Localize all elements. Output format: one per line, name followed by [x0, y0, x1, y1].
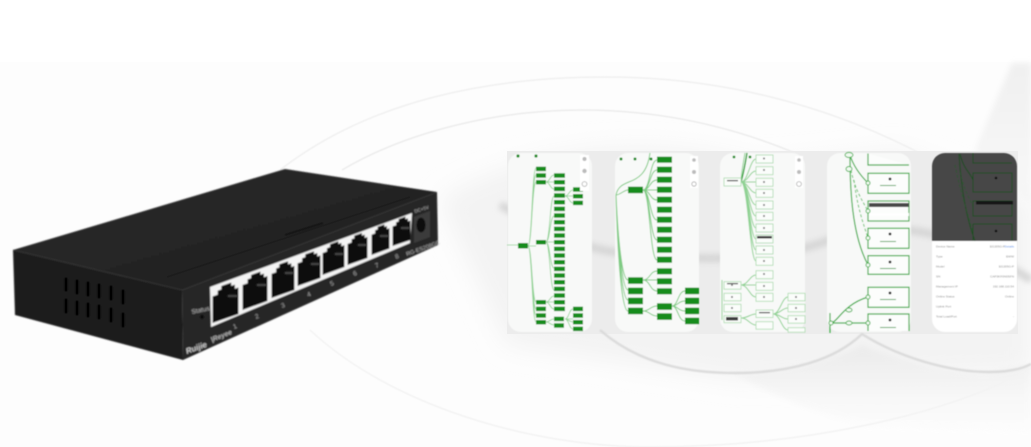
card glyphs	[880, 178, 896, 328]
device detail rows: Type	[936, 254, 943, 258]
side face	[13, 250, 183, 360]
panel: topology view, device cards	[720, 153, 805, 332]
panel tools	[580, 155, 589, 191]
dimmed topology backdrop	[932, 153, 1017, 241]
front face	[182, 192, 438, 360]
port numbers: 4	[306, 291, 312, 299]
port numbers: 5	[329, 280, 335, 288]
port numbers: 8	[394, 253, 400, 261]
device detail rows: Details	[1005, 244, 1014, 248]
port frame	[210, 213, 412, 327]
device detail rows: SN	[936, 274, 940, 278]
device labels: |Reyee	[210, 329, 233, 344]
enlarged connectors	[830, 155, 868, 333]
device cards	[724, 155, 805, 332]
port numbers	[232, 253, 400, 331]
device detail rows: Management IP	[936, 284, 958, 288]
device detail rows: EG205G-P	[999, 264, 1014, 268]
side vents	[66, 279, 123, 326]
port numbers: 7	[374, 262, 380, 270]
ethernet ports 1 to 8	[212, 215, 410, 323]
tree connectors	[616, 153, 685, 321]
status LED	[200, 315, 204, 319]
card icons	[731, 158, 797, 320]
highlighted dark cards	[726, 180, 772, 320]
panel: device detail sheet	[932, 153, 1017, 332]
panel: topology view, full tree	[507, 153, 592, 332]
tree nodes	[620, 157, 699, 324]
device labels: Status	[191, 305, 211, 316]
device detail rows: Uplink Port	[936, 304, 951, 308]
device detail rows: Online Status	[936, 294, 955, 298]
device detail rows: CAP3KF0N0SFN	[990, 274, 1014, 278]
connector nodes	[829, 152, 870, 325]
port numbers: 1	[232, 323, 238, 331]
device detail rows: 192.168.110.54	[993, 284, 1014, 288]
power jack	[414, 211, 430, 243]
port numbers: 6	[352, 270, 358, 278]
panel: topology view, zoomed tree	[615, 153, 699, 332]
card connectors	[722, 153, 788, 330]
panel: topology view, enlarged cards	[827, 152, 911, 333]
enlarged cards	[868, 154, 909, 331]
switch product photo	[13, 169, 441, 360]
device detail rows	[936, 244, 1014, 318]
panel tools	[690, 156, 698, 188]
device detail rows: Online	[1005, 294, 1014, 298]
lid fold line	[167, 197, 410, 277]
port numbers: 2	[254, 313, 260, 321]
device labels	[185, 204, 441, 356]
device labels: RG-ES208GC	[406, 240, 441, 258]
device labels: Ruijie	[185, 340, 209, 356]
port contact highlights	[228, 227, 409, 297]
device detail rows: EG205G-P	[990, 244, 1005, 248]
device detail rows: EWW	[1006, 254, 1014, 258]
highlighted card	[869, 203, 909, 216]
device detail rows: -	[1013, 314, 1014, 318]
top face	[13, 169, 437, 290]
tree connectors	[507, 168, 573, 329]
device detail rows: Model	[936, 264, 945, 268]
device detail rows: Total Load/Port	[936, 314, 957, 318]
port numbers: 3	[280, 302, 286, 310]
tree nodes	[516, 154, 583, 331]
device detail rows: Device Name	[936, 244, 955, 248]
panel tools	[795, 156, 803, 188]
device labels: DC+5V	[414, 204, 430, 214]
